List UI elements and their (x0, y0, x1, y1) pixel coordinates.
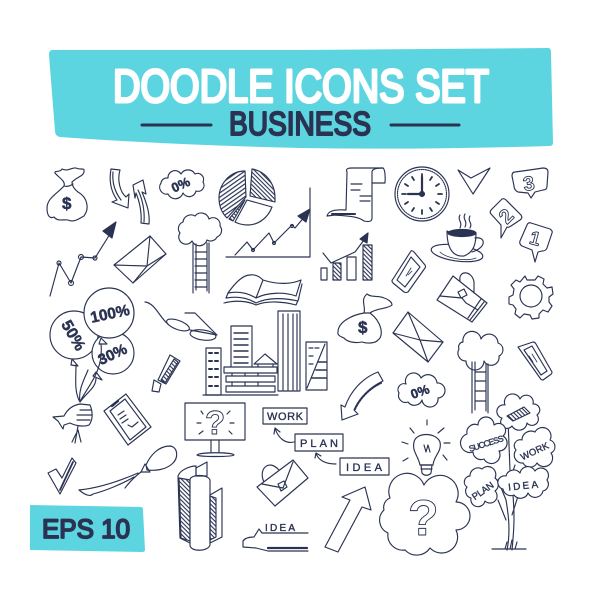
icon: cylinders (178, 462, 222, 550)
icon: paper scroll (327, 168, 385, 222)
icon: down arrow (110, 169, 129, 208)
icon: ribbon balloon (79, 446, 177, 495)
icon: money bag (47, 168, 87, 221)
icon: percent cloud (160, 170, 204, 199)
line chart with arrow (226, 188, 310, 257)
label: eps 10: EPS 10 (42, 514, 130, 544)
icon: briefcase (437, 273, 487, 322)
icon: check mark (48, 458, 76, 494)
low rise (203, 367, 278, 395)
tall building (231, 326, 252, 368)
icon: money bag: $ (62, 194, 72, 213)
cloud: work (514, 428, 555, 467)
label: plan: PLAN (300, 438, 338, 450)
icon: exclamation mark (152, 355, 180, 392)
roof house (254, 354, 277, 367)
cloud: work: WORK (519, 440, 551, 463)
icon: speech bubble 1 (520, 223, 552, 262)
balloon 100% (84, 288, 134, 344)
balloons in hand (50, 288, 134, 443)
icon: curved arrow (341, 372, 383, 420)
icon: smartphone 2 (518, 342, 552, 380)
icon: growth arrow (50, 222, 116, 296)
icon: open book (224, 275, 302, 305)
cloud: success: SUCCESS (468, 433, 505, 454)
icon: speech bubble 1: 1 (527, 228, 543, 251)
icon: glasses (145, 302, 217, 342)
icon: money bag 2 (338, 294, 392, 343)
icon: cloud with ladder 2 (458, 331, 503, 413)
cloud: money (497, 394, 540, 430)
icon: up arrow (133, 180, 149, 224)
icon: coffee cup (430, 214, 484, 265)
balloon 50% (50, 311, 98, 366)
idea flow labels (263, 408, 389, 475)
city buildings (203, 311, 327, 395)
icon: smartphone (392, 251, 426, 292)
subtitle: BUSINESS (229, 105, 371, 142)
cloud: plan (464, 467, 498, 507)
icon: monitor with question mark (185, 403, 245, 456)
balloon 100%: 100% (89, 302, 131, 327)
pie chart (219, 169, 275, 225)
icon: briefcase 2 (257, 460, 308, 506)
icon: check mark outline (458, 168, 490, 194)
skyscraper (278, 311, 300, 391)
icon: percent cloud 2: 0% (409, 381, 432, 402)
balloon 50%: 50% (57, 318, 88, 354)
icon: clipboard (104, 394, 151, 445)
icon: envelope 2 (393, 312, 443, 362)
icon: hand (53, 404, 92, 443)
icon: money bag 2: $ (358, 318, 368, 337)
bar chart with arrow (321, 233, 372, 280)
label: idea: IDEA (346, 462, 383, 474)
icon: speech bubble 2: 2 (495, 205, 518, 228)
label: work: WORK (267, 411, 304, 423)
icon: speech bubble 3 (512, 168, 548, 198)
icon: idea pen: IDEA (265, 523, 295, 534)
icon: light bulb (402, 420, 450, 475)
header banner (49, 48, 553, 149)
icon: speech bubble 2 (490, 199, 522, 238)
icon: idea pen (243, 523, 308, 551)
icon: percent cloud: 0% (169, 174, 193, 195)
cloud: plan: PLAN (470, 480, 496, 503)
cloud: idea (498, 467, 548, 498)
icon: cloud with ladder (178, 213, 222, 293)
icon: question cloud (380, 473, 470, 555)
building right (306, 342, 327, 390)
icon: big arrow (325, 487, 371, 552)
icon: percent cloud 2 (398, 373, 445, 407)
balloon 30% (92, 332, 134, 380)
icon: gear (509, 276, 553, 319)
cloud: idea: IDEA (508, 480, 539, 494)
building left (206, 348, 221, 395)
label: eps 10 (30, 505, 145, 552)
icon: monitor with question mark: ? (205, 404, 225, 441)
title: DOODLE ICONS SET (113, 60, 489, 112)
icon: clock (395, 167, 449, 221)
icon: envelope (114, 236, 166, 283)
balloon 30%: 30% (96, 341, 130, 369)
money tree (461, 394, 555, 550)
icon: speech bubble 3: 3 (522, 172, 536, 196)
icon: question cloud: ? (408, 490, 439, 546)
cloud: success (461, 417, 507, 464)
